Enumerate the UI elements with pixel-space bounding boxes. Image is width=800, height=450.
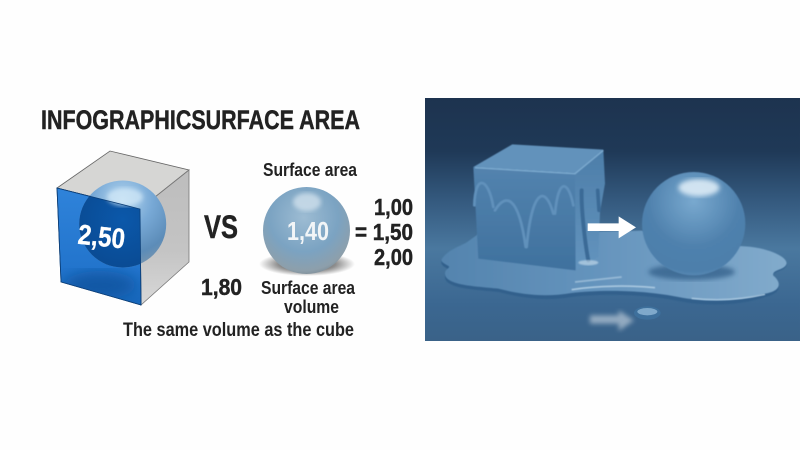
icon: transparent cube with sphere: [57, 151, 189, 305]
label: surface area top: Surface area: [263, 160, 358, 180]
drips: [474, 183, 573, 247]
puddle: [441, 262, 786, 304]
values list: 2,00: [374, 244, 413, 270]
values list: 1,00: [374, 194, 413, 220]
droplet: [634, 306, 661, 320]
cube right face: [140, 170, 189, 305]
cube: [473, 144, 605, 270]
title: INFOGRAPHICSURFACE AREA: [41, 105, 360, 135]
sphere shadow: [648, 264, 735, 280]
reflection highlight near cube: [578, 260, 598, 265]
value: sphere: 1,40: [287, 216, 329, 246]
arrow: cube to sphere: [588, 216, 636, 238]
sphere: [642, 172, 745, 280]
panel: melting cube photo: [425, 98, 800, 341]
values list: [355, 194, 413, 270]
sphere inside cube: [57, 180, 166, 305]
value: 1,80: 1,80: [201, 274, 242, 300]
values list: = 1,50: [355, 219, 413, 245]
icon: sphere: [259, 187, 355, 276]
cube front: [473, 167, 576, 270]
cube top: [473, 144, 603, 173]
caption: The same volume as the cube: [123, 319, 354, 341]
label: VS: VS: [204, 209, 238, 245]
cube side: [574, 150, 606, 236]
value: cube: 2,50: [77, 219, 127, 255]
puddle highlights: [572, 277, 765, 300]
label: volume: volume: [284, 297, 339, 317]
sphere shadow: [259, 252, 355, 276]
cube front face: [57, 188, 141, 305]
label: surface area bottom: Surface area: [261, 278, 356, 298]
cube top face: [57, 151, 189, 209]
reflected arrow: [590, 310, 634, 331]
